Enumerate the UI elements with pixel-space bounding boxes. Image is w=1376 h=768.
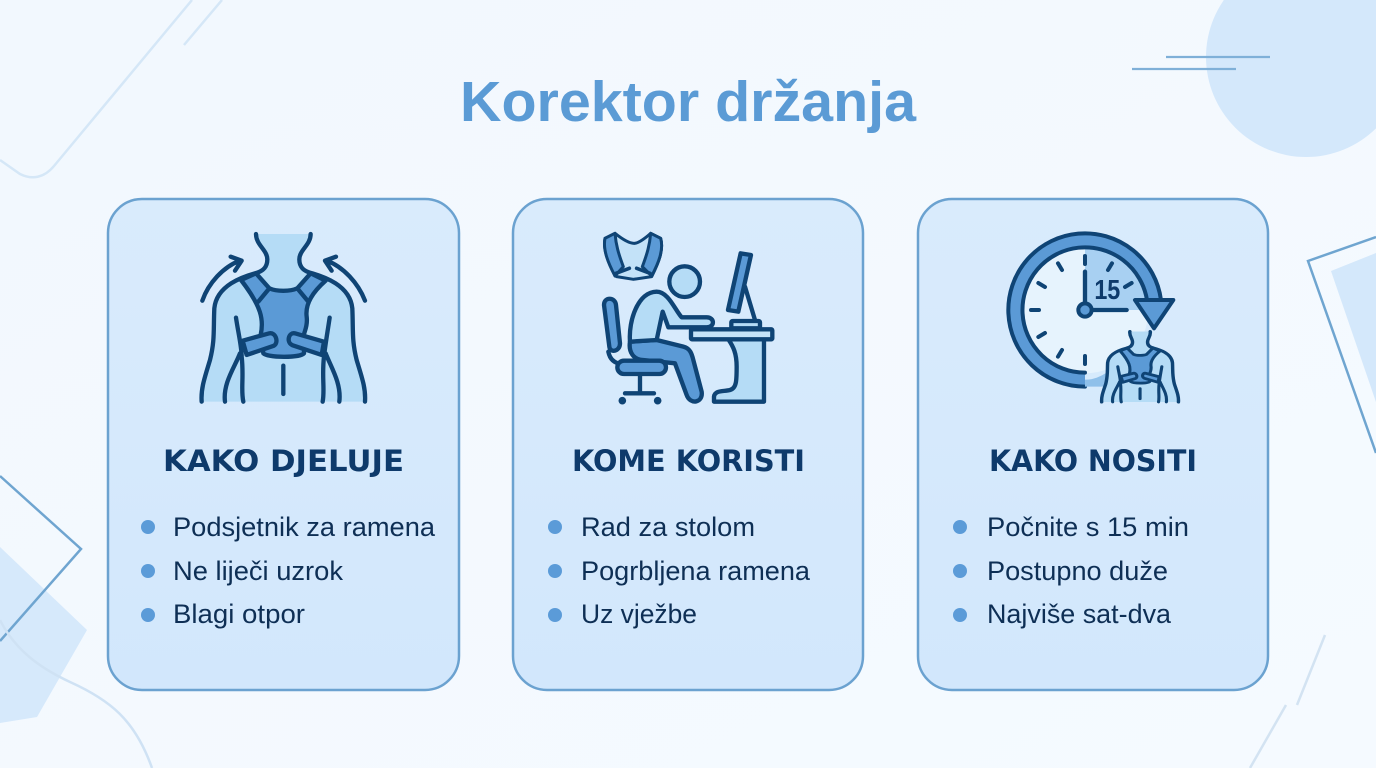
panel: kako nositi <box>918 199 1268 690</box>
bullet list <box>953 512 1189 629</box>
heading: KAKO DJELUJE <box>163 444 404 478</box>
panel: kome koristi <box>513 199 863 690</box>
bullet list: Najviše sat-dva <box>987 599 1172 629</box>
icon: clock with 15 minutes and brace: 15 <box>1094 274 1120 305</box>
icon: clock with 15 minutes and brace <box>1008 233 1178 402</box>
small figure with brace <box>1102 332 1178 402</box>
bullet list: Rad za stolom <box>581 512 755 542</box>
heading: KOME KORISTI <box>572 444 805 478</box>
icon: person at desk with brace <box>604 233 772 402</box>
bullet list <box>141 512 436 629</box>
bullet list: Ne liječi uzrok <box>173 556 343 586</box>
title: Korektor držanja <box>460 70 917 134</box>
heading: KAKO NOSITI <box>989 444 1197 478</box>
bullet list: Uz vježbe <box>581 599 697 629</box>
bullet list: Pogrbljena ramena <box>581 556 811 586</box>
panel: kako djeluje <box>108 199 459 690</box>
bullet list: Počnite s 15 min <box>987 512 1189 542</box>
bullet list: Blagi otpor <box>173 599 305 629</box>
bullet list: Postupno duže <box>987 556 1168 586</box>
bullet list: Podsjetnik za ramena <box>173 512 436 542</box>
icon: back with posture brace <box>202 234 365 402</box>
bullet list <box>548 512 811 629</box>
